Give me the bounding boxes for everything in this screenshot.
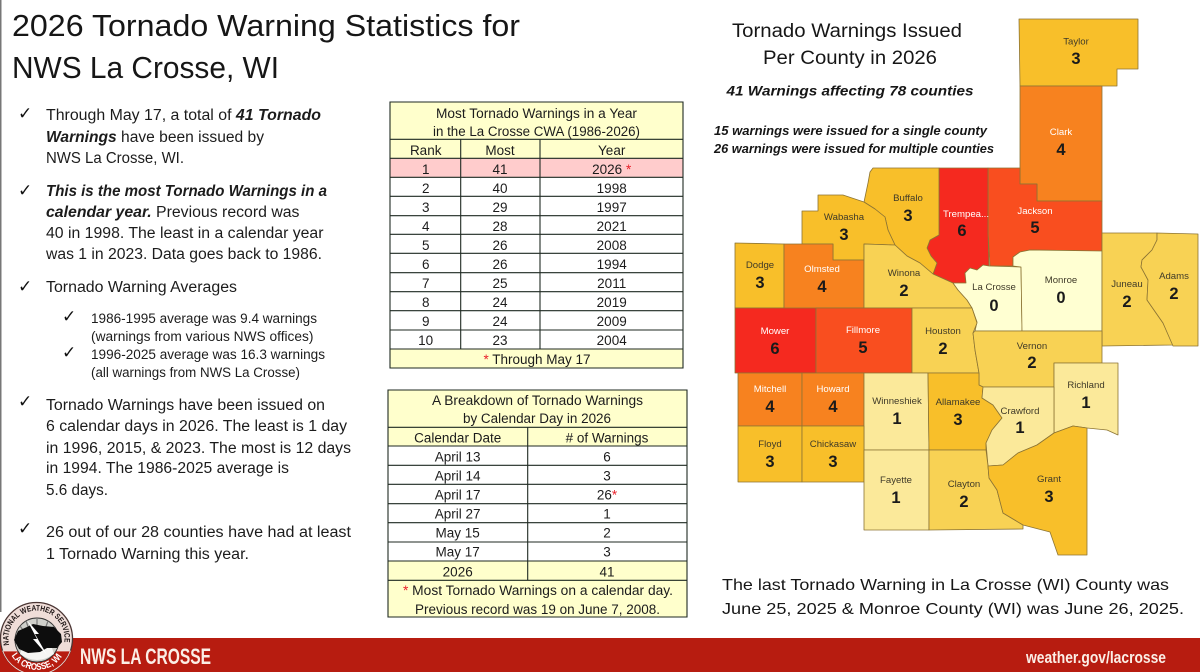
county: Mitchell: 4 xyxy=(765,398,775,416)
county: Wabasha: 3 xyxy=(839,226,849,244)
table: most tornado warnings in a year: 40 xyxy=(492,181,508,196)
table: breakdown by calendar day: May 15 xyxy=(436,526,480,541)
table: most tornado warnings in a year: 2026 * xyxy=(592,162,632,177)
table: breakdown by calendar day: by Calendar Day in 2026 xyxy=(463,411,611,426)
county: Mower: 6 xyxy=(770,340,780,358)
bullet: counties with warnings xyxy=(18,519,352,563)
county: La Crosse: 0 xyxy=(989,297,999,315)
county: Clayton: 2 xyxy=(959,493,969,511)
county: Mower xyxy=(735,308,816,373)
table: most tornado warnings in a year: 3 xyxy=(422,200,429,215)
county: Mower: Mower xyxy=(761,326,790,337)
table: most tornado warnings in a year: 24 xyxy=(492,314,508,329)
table: most tornado warnings in a year: 5 xyxy=(422,238,429,253)
county: Crawford: Crawford xyxy=(1001,406,1039,417)
county: Monroe: 0 xyxy=(1056,289,1066,307)
county: Clark xyxy=(1020,86,1102,201)
county: Winona xyxy=(864,244,972,308)
table: most tornado warnings in a year: 2021 xyxy=(597,219,627,234)
county: Jackson xyxy=(988,168,1102,266)
county: Howard: Howard xyxy=(816,384,850,395)
county: Adams xyxy=(1141,233,1198,346)
bullet: calendar year record: calendar year. Previous record was xyxy=(46,204,300,221)
table: most tornado warnings in a year: 1994 xyxy=(597,257,627,272)
table: breakdown by calendar day: May 17 xyxy=(436,545,480,560)
table: most tornado warnings in a year: Most xyxy=(485,143,515,158)
table: breakdown by calendar day: 1 xyxy=(603,507,611,522)
bullet: calendar days: 5.6 days. xyxy=(46,482,108,499)
logo: National Weather Service La Crosse: NATIONAL WEATHER SERVICE xyxy=(3,605,70,646)
county: Allamakee: Allamakee xyxy=(936,397,980,408)
table: breakdown by calendar day: 41 xyxy=(599,565,615,580)
county: Vernon: 2 xyxy=(1027,354,1037,372)
county: Floyd: 3 xyxy=(765,453,775,471)
county: Winneshiek xyxy=(864,373,929,450)
bullet: tornado warning averages: ✓ xyxy=(62,307,76,327)
table: most tornado warnings in a year: 1998 xyxy=(597,181,627,196)
county: Winona: 2 xyxy=(899,282,909,300)
county: Juneau: Juneau xyxy=(1111,279,1143,290)
county: Dodge: 3 xyxy=(755,274,765,292)
note: last warnings in La Crosse and Monroe counties: The last Tornado Warning in La Crosse (WI) County was xyxy=(722,577,1169,594)
table: most tornado warnings in a year: 9 xyxy=(422,314,429,329)
county: Grant: Grant xyxy=(1037,474,1061,485)
county: Wabasha xyxy=(802,195,895,260)
county: Richland: Richland xyxy=(1067,380,1105,391)
county: Trempealeau: 6 xyxy=(957,222,967,240)
table: most tornado warnings in a year: Rank xyxy=(410,143,442,158)
county: Buffalo: 3 xyxy=(903,207,913,225)
county: La Crosse: La Crosse xyxy=(972,282,1016,293)
county choropleth map xyxy=(735,19,1198,555)
county: Allamakee: 3 xyxy=(953,411,963,429)
bullet: calendar year record: ✓ xyxy=(18,181,32,201)
table: most tornado warnings in a year: 6 xyxy=(422,257,429,272)
table: breakdown by calendar day: 3 xyxy=(603,469,611,484)
county: Vernon xyxy=(973,331,1102,387)
bullet: tornado warning averages: 1996-2025 average was 16.3 warnings xyxy=(91,347,325,362)
table: breakdown by calendar day: April 14 xyxy=(435,469,481,484)
map heading: Tornado Warnings Issued xyxy=(732,21,962,42)
county: Chickasaw xyxy=(802,426,864,482)
county: Vernon: Vernon xyxy=(1017,341,1047,352)
county: Clark: Clark xyxy=(1050,127,1072,138)
bullet: tornado warning averages: (all warnings from NWS La Crosse) xyxy=(91,365,300,380)
table: breakdown by calendar day xyxy=(388,390,687,617)
county: Houston: Houston xyxy=(925,326,961,337)
bullet: counties with warnings: 1 Tornado Warning this year. xyxy=(46,546,249,563)
county: Winneshiek: Winneshiek xyxy=(872,396,922,407)
bullet: calendar days xyxy=(18,392,351,499)
table: most tornado warnings in a year: 41 xyxy=(492,162,508,177)
map heading: Per County in 2026 xyxy=(763,48,937,69)
county: Jackson: Jackson xyxy=(1017,206,1053,217)
county: Grant: 3 xyxy=(1044,488,1054,506)
table: most tornado warnings in a year: Year xyxy=(598,143,626,158)
county: Chickasaw: 3 xyxy=(828,453,838,471)
map subheading: warnings summary xyxy=(713,82,994,156)
table: most tornado warnings in a year: Most Tornado Warnings in a Year xyxy=(436,106,638,121)
bullet: 41 tornado warnings: Through May 17, a total of 41 Tornado xyxy=(46,107,321,124)
county: Taylor: Taylor xyxy=(1063,37,1090,48)
bullet: tornado warning averages: 1986-1995 average was 9.4 warnings xyxy=(91,311,317,326)
county: Dodge xyxy=(735,243,784,308)
county: La Crosse xyxy=(953,265,1022,331)
table: breakdown by calendar day: * Most Tornado Warnings on a calendar day. xyxy=(403,583,673,598)
county: Monroe xyxy=(1013,250,1102,331)
table: most tornado warnings in a year: 24 xyxy=(492,295,508,310)
county: Monroe: Monroe xyxy=(1045,275,1077,286)
panel: key statistics bullet list xyxy=(18,104,352,563)
table: most tornado warnings in a year: 26 xyxy=(492,238,508,253)
bullet: calendar year record xyxy=(18,181,327,263)
county: Richland xyxy=(1054,363,1118,435)
table: most tornado warnings in a year: 2009 xyxy=(597,314,627,329)
bullet: calendar year record: This is the most Tornado Warnings in a xyxy=(46,183,327,200)
table: breakdown by calendar day: Calendar Date xyxy=(414,431,501,446)
table: most tornado warnings in a year: in the La Crosse CWA (1986-2026) xyxy=(433,124,640,139)
footer office name: NWS LA CROSSE xyxy=(80,644,211,669)
table: most tornado warnings in a year: * Through May 17 xyxy=(483,352,591,367)
county: Juneau xyxy=(1102,233,1173,346)
bullet: 41 tornado warnings: NWS La Crosse, WI. xyxy=(46,150,184,167)
county: Winneshiek: 1 xyxy=(892,410,902,428)
county: Jackson: 5 xyxy=(1030,219,1040,237)
footer website: weather.gov/lacrosse xyxy=(1025,648,1166,667)
table: breakdown by calendar day: 26* xyxy=(597,488,618,503)
note: last warnings in La Crosse and Monroe counties xyxy=(722,577,1184,618)
county: Houston xyxy=(912,308,979,373)
table: breakdown by calendar day: April 13 xyxy=(435,450,481,465)
county: Olmsted: 4 xyxy=(817,278,827,296)
county: Chickasaw: Chickasaw xyxy=(810,439,856,450)
county: Clark: 4 xyxy=(1056,141,1066,159)
table: most tornado warnings in a year: 1 xyxy=(422,162,429,177)
map heading xyxy=(732,21,962,69)
bullet: tornado warning averages: Tornado Warning Averages xyxy=(46,279,237,296)
table: most tornado warnings in a year: 10 xyxy=(418,333,433,348)
county: Crawford: 1 xyxy=(1015,419,1025,437)
table: most tornado warnings in a year: 2019 xyxy=(597,295,627,310)
table: most tornado warnings in a year: 7 xyxy=(422,276,429,291)
bullet: calendar days: in 1996, 2015, & 2023. The most is 12 days xyxy=(46,440,351,457)
bullet: tornado warning averages: ✓ xyxy=(18,277,32,297)
county: Allamakee xyxy=(928,373,1002,450)
bullet: calendar days: in 1994. The 1986-2025 average is xyxy=(46,460,289,477)
bullet: 41 tornado warnings xyxy=(18,104,321,167)
table: most tornado warnings in a year: 4 xyxy=(422,219,430,234)
map subheading: warnings summary: 15 warnings were issued for a single county xyxy=(714,124,988,138)
table: most tornado warnings in a year: 2011 xyxy=(597,276,626,291)
bullet: calendar days: 6 calendar days in 2026. The least is 1 day xyxy=(46,418,347,435)
logo: National Weather Service La Crosse xyxy=(0,602,74,672)
county: Fillmore: 5 xyxy=(858,339,868,357)
county: Fayette: 1 xyxy=(891,489,901,507)
county: Floyd: Floyd xyxy=(758,439,782,450)
county: Adams: 2 xyxy=(1169,285,1179,303)
table: most tornado warnings in a year: 2008 xyxy=(597,238,627,253)
bullet: tornado warning averages: (warnings from various NWS offices) xyxy=(91,329,314,344)
county: Trempealeau xyxy=(927,168,989,283)
county: Clayton: Clayton xyxy=(948,479,980,490)
table: breakdown by calendar day: April 27 xyxy=(435,507,481,522)
county: Floyd xyxy=(738,426,802,482)
county: Howard xyxy=(802,373,864,426)
table: breakdown by calendar day: 2026 xyxy=(443,565,473,580)
county: Mitchell: Mitchell xyxy=(754,384,786,395)
table: most tornado warnings in a year: 28 xyxy=(492,219,508,234)
county: Trempealeau: Trempea... xyxy=(943,209,989,220)
table: breakdown by calendar day: 6 xyxy=(603,450,611,465)
table: most tornado warnings in a year: 2004 xyxy=(597,333,627,348)
title xyxy=(12,8,520,85)
county: Olmsted: Olmsted xyxy=(804,264,840,275)
table: breakdown by calendar day: April 17 xyxy=(435,488,481,503)
county: Houston: 2 xyxy=(938,340,948,358)
county: Buffalo: Buffalo xyxy=(893,193,923,204)
table: breakdown by calendar day: A Breakdown of Tornado Warnings xyxy=(432,393,643,408)
county: Fayette: Fayette xyxy=(880,475,912,486)
county: Taylor: 3 xyxy=(1071,50,1081,68)
county: Richland: 1 xyxy=(1081,394,1091,412)
county: Fillmore: Fillmore xyxy=(846,325,880,336)
county: Winona: Winona xyxy=(888,268,921,279)
county: Wabasha: Wabasha xyxy=(824,212,865,223)
county: Olmsted xyxy=(784,244,864,311)
table: breakdown by calendar day: Previous record was 19 on June 7, 2008. xyxy=(415,602,660,617)
bullet: calendar days: Tornado Warnings have been issued on xyxy=(46,397,325,414)
table: breakdown by calendar day: 3 xyxy=(603,545,611,560)
bullet: counties with warnings: 26 out of our 28 counties have had at least xyxy=(46,524,352,541)
table: most tornado warnings in a year: 23 xyxy=(492,333,508,348)
title: NWS La Crosse, WI xyxy=(12,50,279,85)
map subheading: warnings summary: 41 Warnings affecting 78 counties xyxy=(725,82,974,98)
county: Dodge: Dodge xyxy=(746,260,774,271)
title: 2026 Tornado Warning Statistics for xyxy=(12,8,520,43)
county: Buffalo xyxy=(864,168,939,274)
bullet: 41 tornado warnings: ✓ xyxy=(18,104,32,124)
table: most tornado warnings in a year: 2 xyxy=(422,181,429,196)
bullet: counties with warnings: ✓ xyxy=(18,519,32,539)
county: Mitchell xyxy=(738,373,802,426)
table: most tornado warnings in a year: 29 xyxy=(492,200,508,215)
bullet: tornado warning averages xyxy=(18,277,325,380)
county: Howard: 4 xyxy=(828,398,838,416)
county: Adams: Adams xyxy=(1159,271,1189,282)
county: Fillmore xyxy=(816,308,912,373)
bullet: calendar days: ✓ xyxy=(18,392,32,412)
table: most tornado warnings in a year: 26 xyxy=(492,257,508,272)
county: Taylor xyxy=(1019,19,1138,86)
table: most tornado warnings in a year: 8 xyxy=(422,295,429,310)
table: most tornado warnings in a year: 25 xyxy=(492,276,508,291)
bullet: tornado warning averages: ✓ xyxy=(62,343,76,363)
footer band xyxy=(0,638,1200,672)
bullet: 41 tornado warnings: Warnings have been issued by xyxy=(46,129,264,146)
county: Juneau: 2 xyxy=(1122,293,1132,311)
bullet: calendar year record: was 1 in 2023. Data goes back to 1986. xyxy=(45,246,322,263)
county: Fayette xyxy=(864,450,929,530)
county: Clayton xyxy=(929,450,1023,530)
table: most tornado warnings in a year xyxy=(390,102,683,368)
table: most tornado warnings in a year: 1997 xyxy=(597,200,627,215)
table: breakdown by calendar day: # of Warnings xyxy=(566,431,649,446)
table: breakdown by calendar day: 2 xyxy=(603,526,611,541)
note: last warnings in La Crosse and Monroe counties: June 25, 2025 & Monroe County (WI) was June 26, 2025. xyxy=(722,601,1184,618)
map subheading: warnings summary: 26 warnings were issued for multiple counties xyxy=(713,142,994,156)
bullet: calendar year record: 40 in 1998. The least in a calendar year xyxy=(46,225,324,242)
county: Grant xyxy=(988,426,1087,555)
county: Crawford xyxy=(982,387,1054,466)
